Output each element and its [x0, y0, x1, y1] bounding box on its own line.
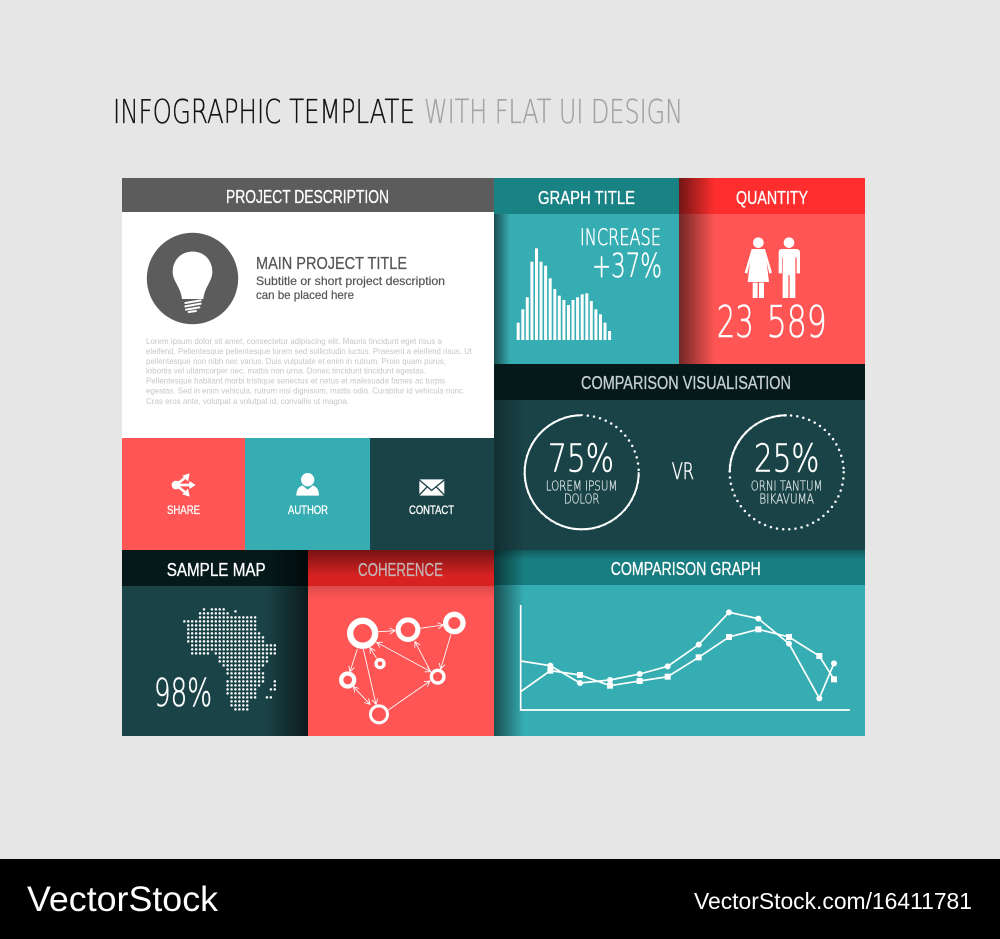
gauge: 75%: LOREM IPSUM — [546, 479, 617, 495]
icon: share arrows — [172, 473, 196, 497]
panel: graph title — [494, 178, 679, 364]
label: author: AUTHOR — [288, 503, 328, 517]
gauge: 25%: ORNI TANTUM — [751, 479, 822, 495]
label: share: SHARE — [167, 503, 200, 517]
panel: quantity — [679, 178, 865, 364]
title: WITH FLAT UI DESIGN — [424, 92, 683, 131]
panel: comparison graph — [494, 550, 865, 736]
text: lorem ipsum body — [146, 336, 473, 406]
text: lorem ipsum body: lobortis vel ullamcorper nec, mattis non urna. Donec tincidunt tincidunt egestas. — [146, 366, 426, 376]
heading: comparison visualisation: COMPARISON VISUALISATION — [581, 373, 791, 393]
panel: share — [122, 438, 245, 550]
text: lorem ipsum body: eleifend. Pellentesque pellentesque lorem sed sollicitudin luctus. Praesent a eleifend risus. Ut — [146, 346, 473, 356]
gauge: 75%: DOLOR — [564, 491, 599, 507]
text: increase — [580, 226, 662, 285]
heading: comparison graph: COMPARISON GRAPH — [611, 559, 761, 579]
text: lorem ipsum body: Lorem ipsum dolor sit amet, consectetur adipiscing elit. Mauris tincidunt eget risus a — [146, 336, 442, 346]
icon: envelope — [419, 479, 444, 496]
footer logo: VectorStock — [27, 880, 219, 919]
network diagram — [341, 614, 463, 723]
label: contact: CONTACT — [409, 503, 455, 517]
number: 23 589: 23 — [717, 297, 754, 348]
label: VR: VR — [672, 460, 694, 485]
footer bar — [0, 859, 1000, 939]
gauge: 25% — [730, 415, 844, 529]
footer url: VectorStock.com/16411781 — [694, 888, 972, 914]
heading: quantity: QUANTITY — [736, 188, 808, 208]
number: 98%: 98% — [154, 671, 212, 715]
text: lorem ipsum body: egestas. Sed in enim vehicula, rutrum nisi dignissim, mattis odio. Curabitur id vehicula nunc. — [146, 386, 465, 396]
heading: coherence: COHERENCE — [358, 560, 443, 580]
text: lorem ipsum body: Pellentesque habitant morbi tristique senectus et netus et malesuada fames ac turpis — [146, 376, 445, 386]
panel: coherence — [308, 550, 494, 736]
heading: project description: PROJECT DESCRIPTION — [226, 187, 389, 207]
map: dotted Africa — [184, 609, 275, 709]
panel: contact — [370, 438, 494, 550]
panel: author — [245, 438, 370, 550]
heading: sample map: SAMPLE MAP — [167, 560, 266, 580]
icon: light bulb — [147, 233, 238, 324]
panel: sample map — [122, 550, 308, 736]
icon: person — [296, 473, 319, 496]
gauge: 25%: BIKAVUMA — [759, 491, 814, 507]
text: increase: +37% — [592, 246, 662, 285]
line chart — [521, 605, 850, 710]
number: 23 589 — [717, 297, 827, 348]
text: main project title: MAIN PROJECT TITLE — [256, 253, 407, 273]
gauge: 75% — [525, 415, 639, 529]
title: INFOGRAPHIC TEMPLATE — [113, 92, 415, 131]
text: main project title — [256, 253, 445, 302]
text: main project title: can be placed here — [256, 288, 354, 302]
bar chart: histogram — [517, 248, 611, 340]
panel: comparison visualisation — [494, 364, 865, 550]
gauge: 75%: 75% — [548, 437, 614, 481]
gauge: 25%: 25% — [754, 437, 819, 481]
icon: people — [745, 237, 800, 298]
text: increase: INCREASE — [580, 226, 661, 251]
number: 23 589: 589 — [767, 297, 827, 348]
text: lorem ipsum body: Cras eros ante, volutpat a volutpat id, convallis ut magna. — [146, 396, 349, 406]
text: main project title: Subtitle or short project description — [256, 274, 445, 288]
text: lorem ipsum body: pellentesque non nibh nec varius. Duis vulputate et enim in rutrum. Proin quam purus, — [146, 356, 446, 366]
panel: project description — [122, 178, 494, 438]
heading: graph title: GRAPH TITLE — [538, 188, 635, 208]
